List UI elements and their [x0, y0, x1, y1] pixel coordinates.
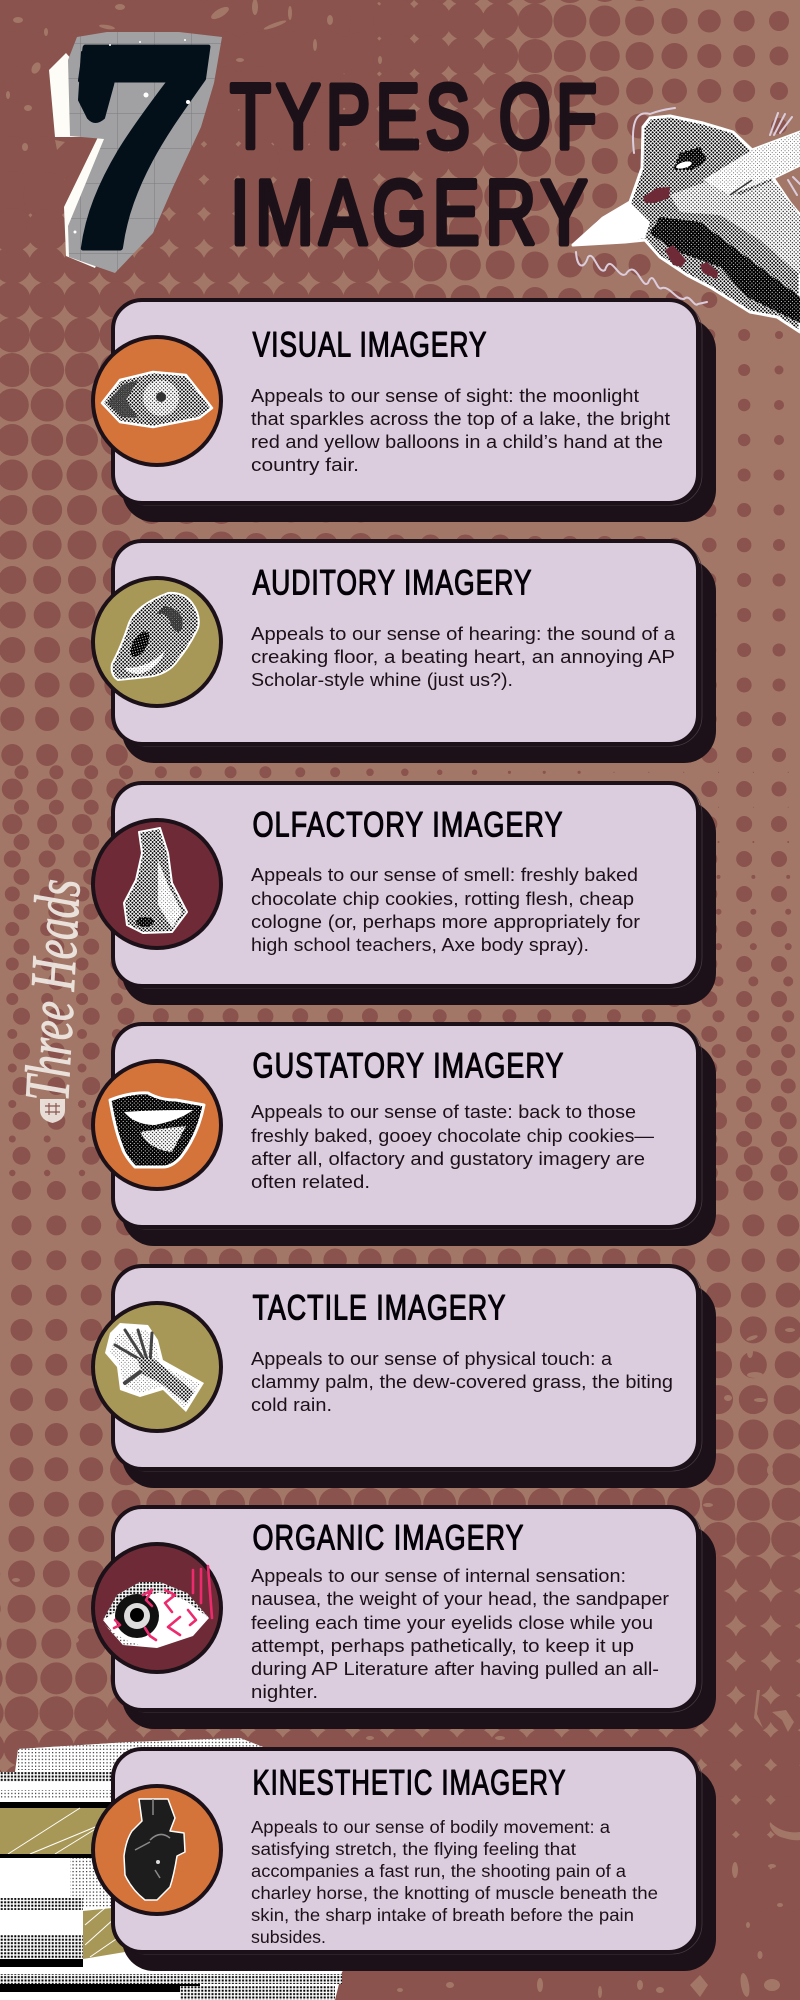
text: gustatory imagery: freshly baked, gooey chocolate chip cookies— — [251, 1125, 655, 1146]
text: organic imagery: during AP Literature after having pulled an all- — [251, 1658, 659, 1679]
text: organic imagery: nausea, the weight of your head, the sandpaper — [251, 1588, 669, 1609]
text: olfactory imagery: high school teachers, Axe body spray). — [251, 934, 589, 955]
text: visual imagery: that sparkles across the top of a lake, the bright — [251, 408, 670, 429]
text: tactile imagery: cold rain. — [251, 1394, 332, 1415]
text: tactile imagery: Appeals to our sense of physical touch: a — [251, 1348, 613, 1369]
text: olfactory imagery: cologne (or, perhaps more appropriately for — [251, 911, 640, 932]
text: tactile imagery: clammy palm, the dew-covered grass, the biting — [251, 1371, 673, 1392]
text: kinesthetic imagery: charley horse, the knotting of muscle beneath the — [251, 1883, 658, 1903]
text: organic imagery: Appeals to our sense of internal sensation: — [251, 1565, 626, 1586]
title — [230, 66, 602, 264]
text: visual imagery: red and yellow balloons in a child’s hand at the — [251, 431, 663, 452]
text: auditory imagery: creaking floor, a beating heart, an annoying AP — [251, 646, 675, 667]
text: kinesthetic imagery — [251, 1817, 658, 1947]
text: organic imagery: attempt, perhaps pathetically, to keep it up — [251, 1635, 634, 1656]
logo: Three Heads: Three Heads — [11, 877, 94, 1103]
text: olfactory imagery — [251, 864, 640, 955]
text: kinesthetic imagery: Appeals to our sense of bodily movement: a — [251, 1817, 610, 1837]
text: olfactory imagery: Appeals to our sense of smell: freshly baked — [251, 864, 638, 885]
heading: visual imagery: VISUAL IMAGERY — [252, 326, 488, 364]
text: auditory imagery — [251, 623, 676, 690]
icon: mouth — [93, 1061, 221, 1189]
icon: bloodshot eye — [93, 1544, 221, 1672]
text: organic imagery: nighter. — [251, 1681, 318, 1702]
text: gustatory imagery: often related. — [251, 1171, 370, 1192]
icon: nose — [93, 820, 221, 948]
title: TYPES OF — [230, 66, 602, 168]
illustration: hand holding a pen — [573, 108, 800, 332]
text: organic imagery: feeling each time your eyelids close while you — [251, 1612, 653, 1633]
text: kinesthetic imagery: accompanies a fast run, the shooting pain of a — [251, 1861, 626, 1881]
text: visual imagery: country fair. — [251, 454, 359, 475]
text: auditory imagery: Scholar-style whine (just us?). — [251, 669, 513, 690]
icon: ear — [93, 578, 221, 706]
panel: tactile imagery — [93, 1266, 716, 1488]
title: IMAGERY — [230, 162, 593, 264]
icon: heart — [93, 1786, 221, 1914]
heading: gustatory imagery: GUSTATORY IMAGERY — [252, 1046, 564, 1086]
text: gustatory imagery: after all, olfactory and gustatory imagery are — [251, 1148, 645, 1169]
panel: organic imagery — [93, 1507, 716, 1729]
heading: olfactory imagery: OLFACTORY IMAGERY — [252, 806, 564, 844]
text: auditory imagery: Appeals to our sense of hearing: the sound of a — [251, 623, 676, 644]
logo: Three Heads — [11, 877, 94, 1123]
text: organic imagery — [251, 1565, 669, 1702]
heading: auditory imagery: AUDITORY IMAGERY — [252, 564, 532, 602]
decorative scribbles — [576, 108, 800, 305]
text: kinesthetic imagery: satisfying stretch, the flying feeling that — [251, 1839, 576, 1859]
text: gustatory imagery: Appeals to our sense of taste: back to those — [251, 1101, 636, 1122]
text: visual imagery — [251, 385, 670, 475]
heading: tactile imagery: TACTILE IMAGERY — [252, 1288, 506, 1328]
text: tactile imagery — [251, 1348, 673, 1415]
text: gustatory imagery — [251, 1101, 655, 1192]
panel: olfactory imagery — [93, 783, 716, 1005]
heading: kinesthetic imagery: KINESTHETIC IMAGERY — [252, 1764, 566, 1802]
text: kinesthetic imagery: subsides. — [251, 1927, 326, 1947]
illustration: stack of books — [0, 1738, 400, 2000]
heading: organic imagery: ORGANIC IMAGERY — [252, 1518, 524, 1558]
panel: visual imagery — [93, 300, 716, 522]
icon: eye — [93, 337, 221, 465]
text: kinesthetic imagery: skin, the sharp intake of breath before the pain — [251, 1905, 634, 1925]
icon: hand — [93, 1303, 221, 1431]
panel: auditory imagery — [93, 541, 716, 763]
text: olfactory imagery: chocolate chip cookies, rotting flesh, cheap — [251, 888, 634, 909]
panel: kinesthetic imagery — [93, 1749, 716, 1971]
panel: gustatory imagery — [93, 1024, 716, 1246]
text: visual imagery: Appeals to our sense of sight: the moonlight — [251, 385, 639, 406]
